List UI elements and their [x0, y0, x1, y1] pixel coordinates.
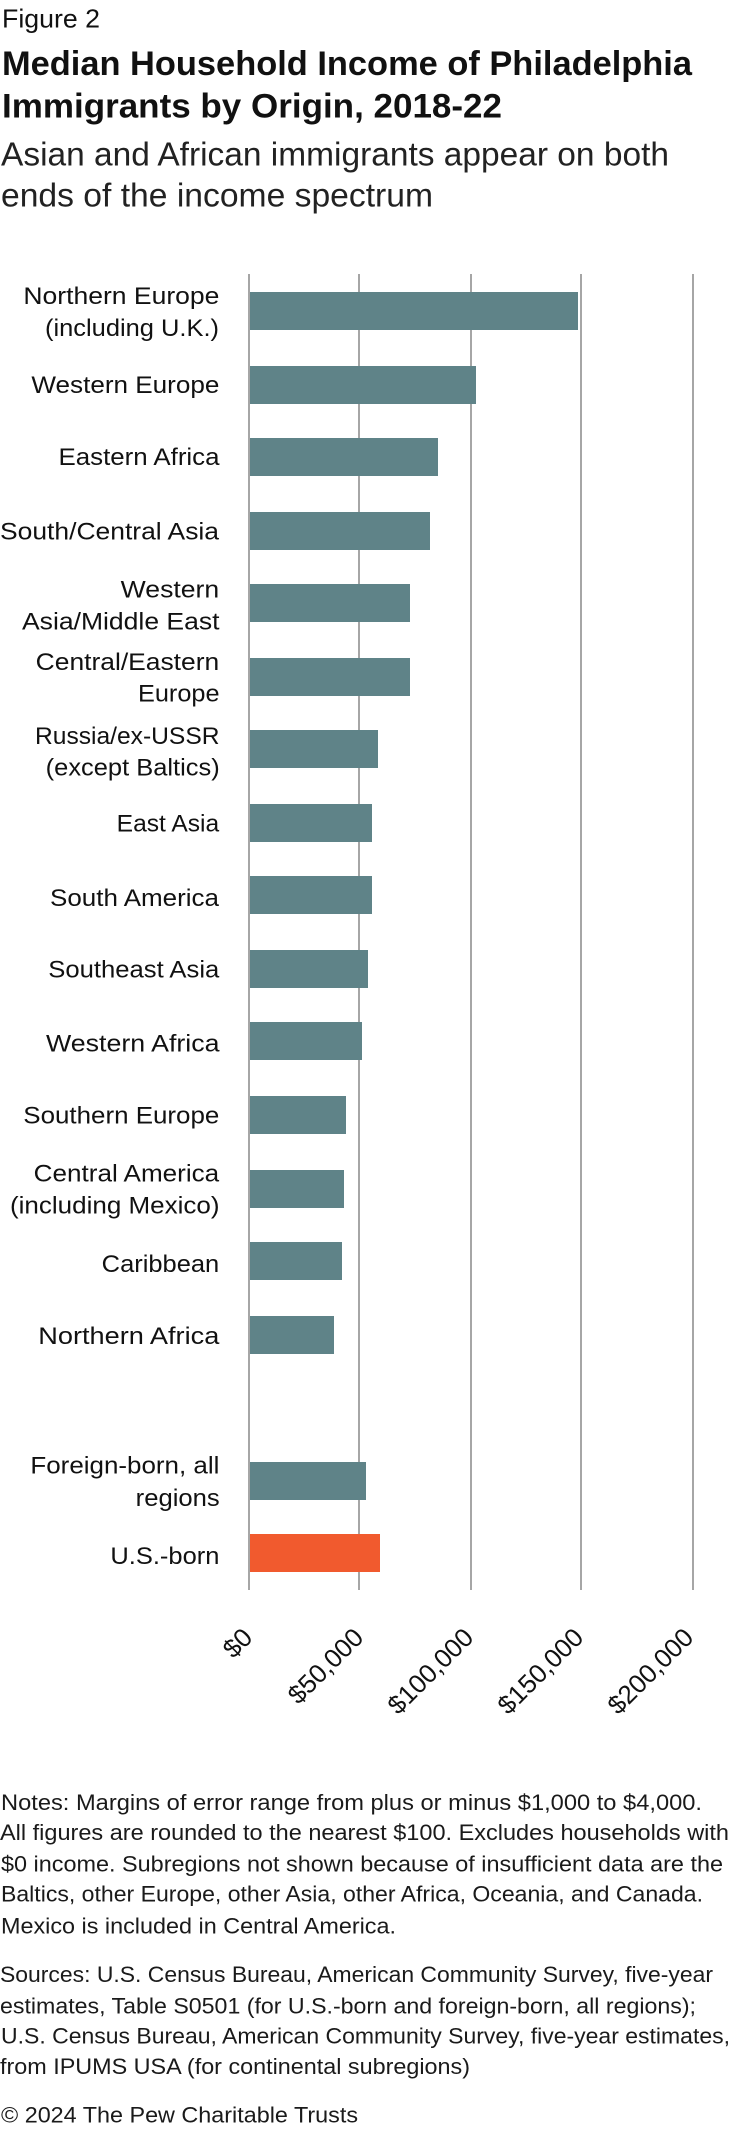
subtitle	[1, 136, 669, 214]
notes: Mexico is included in Central America.	[1, 1913, 396, 1938]
row: South America	[50, 876, 372, 914]
bar chart	[0, 274, 699, 1720]
row: East Asia	[117, 804, 372, 842]
row: Southern Europe	[23, 1096, 346, 1134]
x-axis labels: $100,000	[381, 1622, 479, 1720]
row: Central/Eastern Europe: Europe	[138, 680, 220, 708]
row: Northern Africa: Northern Africa	[38, 1323, 220, 1350]
row: Western Asia/Middle East: Western	[121, 577, 219, 604]
row: Russia/ex-USSR	[35, 723, 378, 782]
row: Western Europe: Western Europe	[31, 372, 219, 399]
row: Foreign-born, all regions	[30, 1453, 366, 1512]
row: Eastern Africa	[58, 438, 438, 476]
row: Western Europe	[31, 366, 476, 404]
row: South/Central Asia: South/Central Asia	[0, 518, 220, 545]
notes: All figures are rounded to the nearest $100. Excludes households with	[0, 1820, 729, 1845]
sources: estimates, Table S0501 (for U.S.-born and foreign-born, all regions);	[0, 1994, 696, 2019]
row: Southeast Asia: Southeast Asia	[48, 956, 220, 983]
row: Caribbean: Caribbean	[102, 1251, 219, 1278]
row: Eastern Africa: Eastern Africa	[58, 444, 220, 471]
row: Western Africa	[46, 1022, 362, 1060]
row: East Asia: East Asia	[117, 811, 220, 838]
x-axis labels: $50,000	[282, 1622, 369, 1710]
row: U.S.-born	[110, 1534, 380, 1572]
sources: U.S. Census Bureau, American Community Survey, five-year estimates,	[1, 2023, 730, 2048]
notes: Baltics, other Europe, other Asia, other Africa, Oceania, and Canada.	[1, 1882, 703, 1907]
figure number: Figure 2	[2, 4, 100, 34]
row: Central/Eastern Europe	[36, 649, 410, 708]
subtitle: ends of the income spectrum	[1, 176, 433, 214]
row: Western Asia/Middle East: Asia/Middle East	[22, 608, 220, 635]
row: South/Central Asia	[0, 512, 430, 550]
row: U.S.-born: U.S.-born	[110, 1543, 219, 1570]
notes: $0 income. Subregions not shown because of insufficient data are the	[1, 1852, 723, 1877]
row: Foreign-born, all regions: Foreign-born, all	[30, 1453, 219, 1480]
row: Central/Eastern Europe: Central/Eastern	[36, 649, 219, 676]
title: Immigrants by Origin, 2018-22	[2, 88, 502, 126]
row: Northern Europe: (including U.K.)	[45, 315, 219, 342]
row: Western Africa: Western Africa	[46, 1030, 220, 1057]
row: Southern Europe: Southern Europe	[23, 1102, 219, 1129]
sources: Sources: U.S. Census Bureau, American Community Survey, five-year	[0, 1962, 713, 1987]
title: Median Household Income of Philadelphia	[2, 45, 693, 83]
row: Northern Europe	[23, 283, 578, 342]
sources: from IPUMS USA (for continental subregions)	[0, 2054, 470, 2079]
notes: Notes: Margins of error range from plus or minus $1,000 to $4,000.	[1, 1790, 702, 1815]
x-axis labels: $0	[217, 1622, 258, 1664]
x-axis labels	[217, 1622, 699, 1720]
x-axis labels: $200,000	[601, 1622, 699, 1720]
subtitle: Asian and African immigrants appear on both	[1, 136, 669, 172]
title	[2, 45, 693, 126]
x-axis labels: $150,000	[491, 1622, 589, 1720]
row: Northern Europe: Northern Europe	[23, 283, 219, 310]
row: Caribbean	[102, 1242, 342, 1280]
row: Western Asia/Middle East	[22, 577, 410, 635]
row: Central America: (including Mexico)	[10, 1192, 220, 1219]
row: Russia/ex-USSR: (except Baltics)	[46, 754, 220, 782]
row: Russia/ex-USSR: Russia/ex-USSR	[35, 723, 220, 750]
sources	[0, 1962, 730, 2079]
row: Northern Africa	[38, 1316, 334, 1354]
copyright: © 2024 The Pew Charitable Trusts	[1, 2103, 358, 2128]
row: Foreign-born, all regions: regions	[136, 1485, 220, 1512]
row: Central America: Central America	[34, 1161, 220, 1188]
row: Central America	[10, 1161, 344, 1219]
row: South America: South America	[50, 885, 220, 912]
notes	[0, 1790, 729, 1938]
row: Southeast Asia	[48, 950, 368, 988]
